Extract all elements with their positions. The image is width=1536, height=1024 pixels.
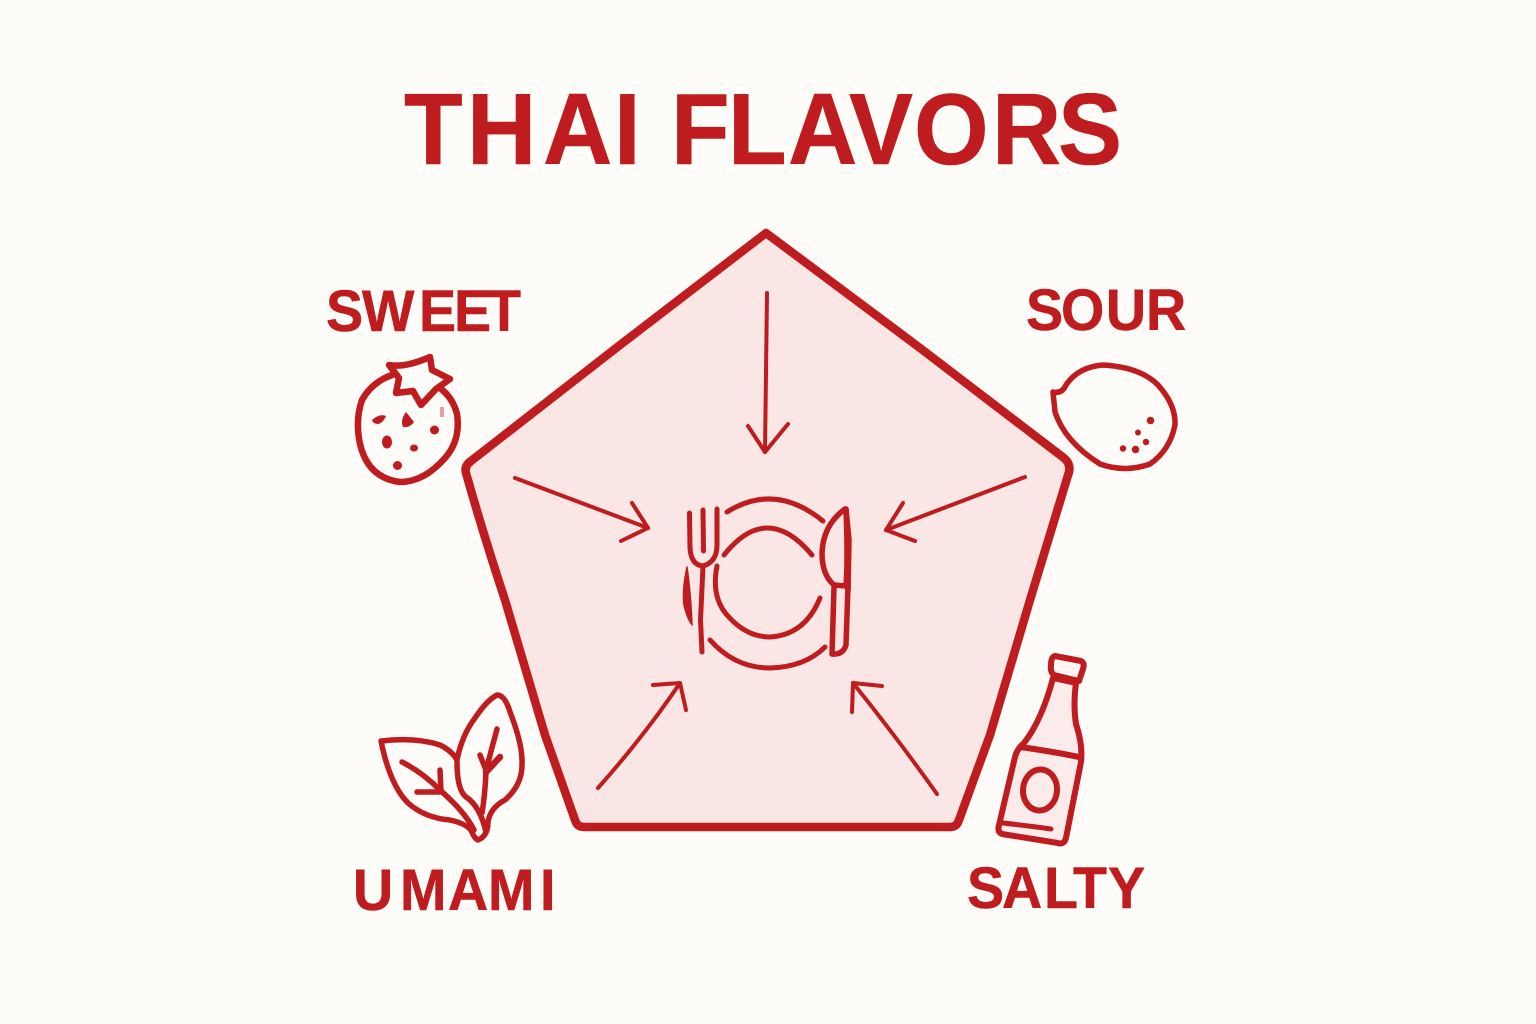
- icon: lemon: [1053, 365, 1175, 468]
- icon: strawberry: [358, 357, 458, 482]
- bottle base line: [1003, 823, 1051, 829]
- icon: sauce bottle: [998, 656, 1084, 843]
- arrow: left to center: [515, 478, 648, 541]
- icon: plate with fork and knife: [683, 499, 849, 668]
- label: sour: SOUR: [1026, 279, 1186, 343]
- bottle label line: [1020, 747, 1079, 757]
- label: umami: UMAMI: [353, 859, 555, 923]
- bottle body: [998, 678, 1081, 843]
- lemon dots: [1147, 417, 1154, 424]
- label: salty: SALTY: [967, 857, 1145, 921]
- icon: leaves: [381, 695, 522, 840]
- fork: [683, 509, 717, 652]
- panel: flavor pentagon: [466, 233, 1069, 827]
- arrow: top to center: [748, 293, 788, 452]
- plate: [710, 499, 825, 668]
- strawberry seeds: [372, 415, 386, 424]
- bottle label letter: [1021, 768, 1059, 812]
- arrow: right to center: [886, 477, 1025, 541]
- title: THAI FLAVORS: [404, 73, 1122, 186]
- bottle cap: [1051, 656, 1084, 681]
- arrow: bottom right to center: [852, 683, 937, 794]
- arrow: bottom left to center: [598, 683, 686, 788]
- label: sweet: SWEET: [326, 280, 521, 344]
- knife: [822, 509, 849, 654]
